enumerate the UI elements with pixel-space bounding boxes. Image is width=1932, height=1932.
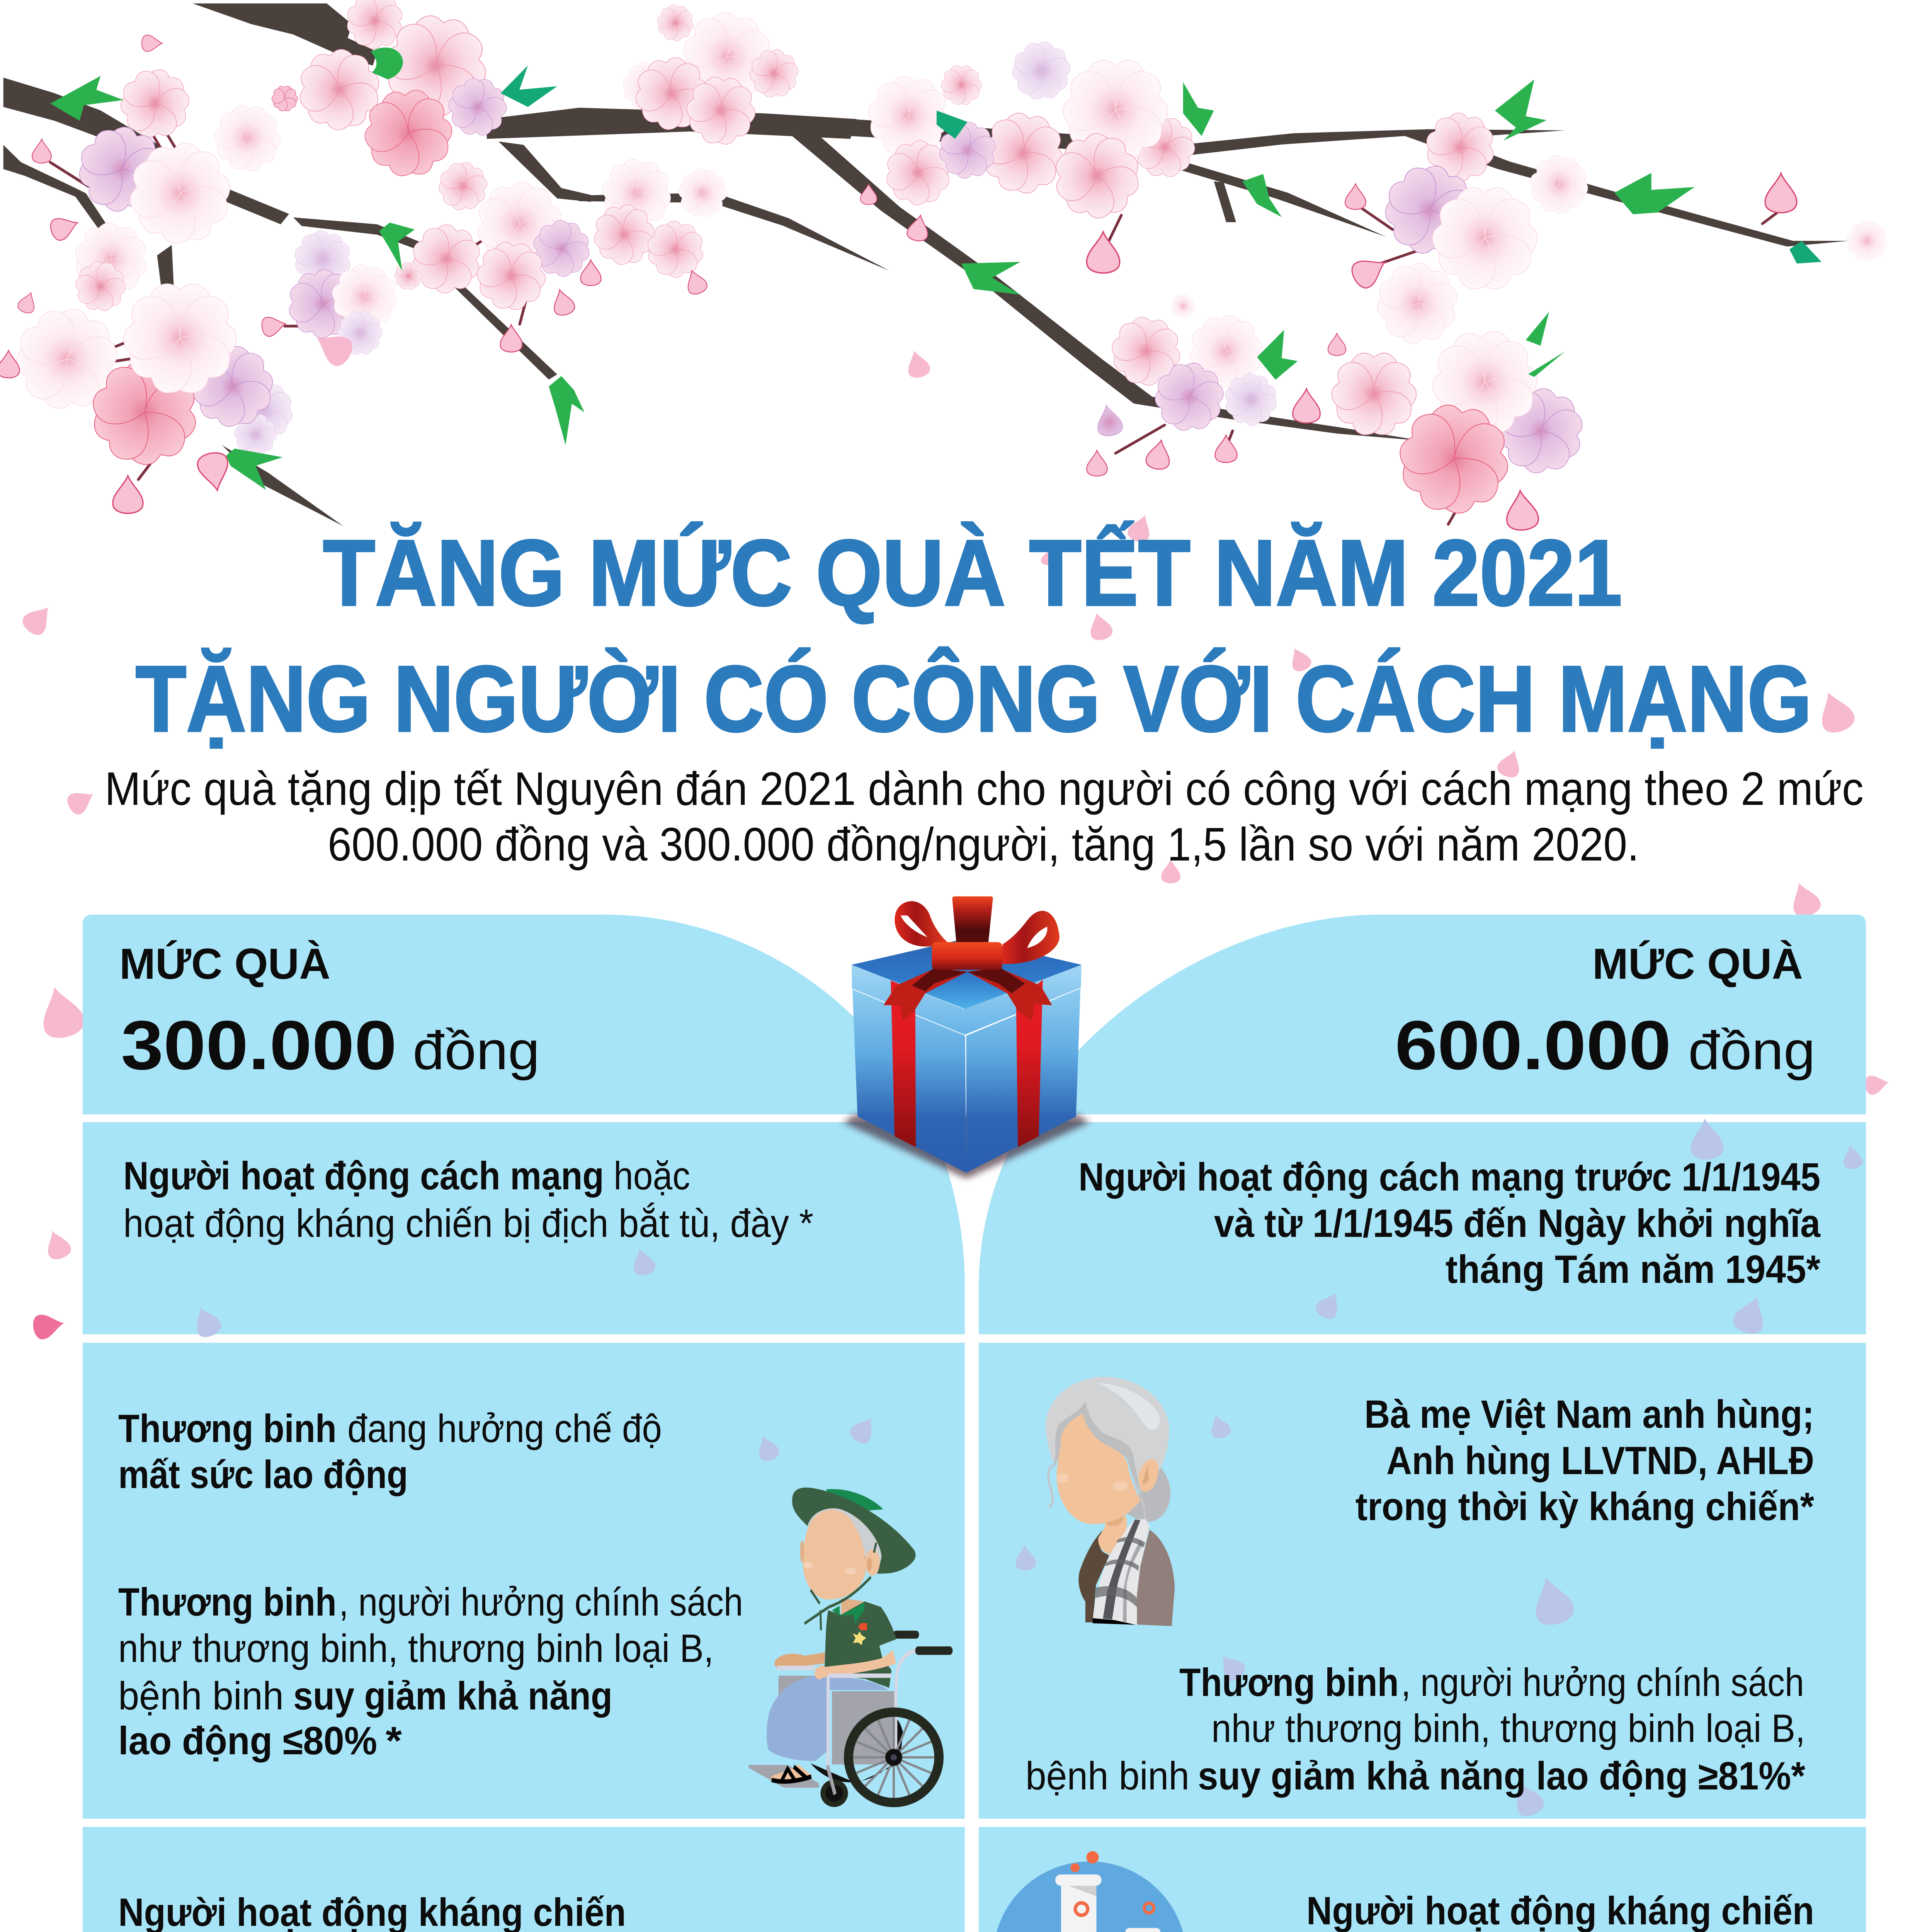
- text: row 2 right: [1078, 1155, 1821, 1291]
- title: [136, 521, 1812, 751]
- left header: 300.000: [121, 1007, 397, 1084]
- bubbles: [1070, 1851, 1099, 1872]
- face: [803, 1510, 866, 1600]
- near arm: [815, 1650, 896, 1679]
- bow loops: [895, 896, 1060, 970]
- hat strap: [804, 1543, 876, 1630]
- cheeks: [1056, 1473, 1128, 1491]
- wheelchair back parts: [779, 1631, 919, 1783]
- text: row 2 left: [123, 1154, 813, 1245]
- text: row 3 right: Anh hùng LLVTND, AHLĐ: [1386, 1439, 1814, 1483]
- stems: [12, 131, 1781, 524]
- far arm: [774, 1652, 825, 1669]
- front caster: [820, 1765, 848, 1807]
- blossoms centre cluster: [627, 2, 1209, 380]
- icon: veteran in wheelchair: [749, 1488, 952, 1807]
- text: row 3 right: Thương binh: [1179, 1660, 1399, 1704]
- neck: [841, 1598, 864, 1616]
- right header: 600.000: [1395, 1007, 1671, 1084]
- panels: light blue rows: [83, 915, 1866, 1932]
- big wheel: [849, 1712, 939, 1803]
- text: row 3 right: suy giảm khả năng lao động ≥81%*: [1198, 1754, 1805, 1798]
- falling petals outside panels: [19, 512, 1891, 1341]
- blossoms right cluster: [1087, 106, 1890, 531]
- hair strands: [1048, 1465, 1145, 1519]
- blossoms left cluster: [0, 0, 738, 514]
- text: row 3 left: Thương binh: [118, 1580, 337, 1624]
- text: row 3 left: mất sức lao động: [118, 1452, 408, 1497]
- text: row 2 right: Người hoạt động cách mạng trước 1/1/1945: [1078, 1155, 1820, 1199]
- icon: chemistry flasks: [993, 1851, 1187, 1932]
- icon: elderly mother: [1046, 1377, 1175, 1626]
- intro text: 600.000 đồng và 300.000 đồng/người, tăng 1,5 lần so với năm 2020.: [328, 818, 1639, 871]
- text: row 3 left: bệnh binh: [118, 1674, 284, 1718]
- text: row 3 right: [1026, 1392, 1814, 1798]
- medal: [852, 1623, 867, 1645]
- hair bun: [1127, 1463, 1170, 1522]
- small flask: [1088, 1903, 1173, 1932]
- text: row 3 left: lao động ≤80%: [118, 1719, 377, 1763]
- text: row 2 right: và từ 1/1/1945 đến Ngày khởi nghĩa: [1214, 1201, 1821, 1245]
- text: row 3 right: như thương binh, thương binh loại B,: [1211, 1706, 1805, 1750]
- text: row 2 left: hoạt động kháng chiến bị địch bắt tù, đày *: [123, 1201, 813, 1245]
- hat brim: [792, 1488, 916, 1574]
- text: row 4 right: Người hoạt động kháng chiến: [1306, 1889, 1814, 1932]
- text: row 3 right: Bà mẹ Việt Nam anh hùng;: [1364, 1392, 1814, 1436]
- front handle: [915, 1646, 952, 1655]
- left header: [119, 940, 540, 1084]
- illustration: cherry blossom branches: [0, 0, 1890, 531]
- gift shadow: [843, 1115, 1089, 1179]
- plaid scarf: [1093, 1519, 1150, 1625]
- left header: đồng: [413, 1020, 540, 1081]
- text: row 3 left: *: [386, 1719, 402, 1763]
- hair: [808, 1509, 882, 1573]
- seat panel: [832, 1691, 895, 1764]
- text: row 2 left: Người hoạt động cách mạng: [123, 1154, 604, 1198]
- right header: [1395, 940, 1815, 1084]
- right header: đồng: [1688, 1020, 1815, 1081]
- footrest: [749, 1765, 819, 1788]
- text: row 2 left: hoặc: [614, 1154, 690, 1198]
- dark shirt: [1078, 1528, 1109, 1622]
- face: [1056, 1413, 1140, 1524]
- round flask: [1020, 1874, 1126, 1932]
- text: row 3 left: như thương binh, thương binh loại B,: [118, 1626, 714, 1670]
- text: row 2 right: tháng Tám năm 1945*: [1446, 1247, 1820, 1291]
- hair: [1046, 1377, 1169, 1480]
- collar: [832, 1602, 865, 1624]
- box faces: [852, 938, 1082, 1173]
- text: row 3 left: suy giảm khả năng: [293, 1674, 612, 1718]
- vertical ribbons: [891, 980, 1043, 1147]
- ribbon tails: [883, 968, 1052, 1021]
- trousers: [767, 1676, 888, 1761]
- panel text: row 1 headers: [119, 940, 1815, 1084]
- intro text: [105, 762, 1864, 871]
- text: row 3 left: đang hưởng chế độ: [347, 1406, 662, 1451]
- leaves: [50, 48, 1821, 490]
- background circle: [993, 1861, 1187, 1932]
- branches: [3, 3, 1849, 526]
- icon: large blue gift box: [843, 896, 1089, 1179]
- frame: [777, 1650, 917, 1765]
- title: TĂNG MỨC QUÀ TẾT NĂM 2021: [323, 521, 1622, 625]
- right header: MỨC QUÀ: [1592, 940, 1803, 988]
- text: row 3 right: trong thời kỳ kháng chiến*: [1355, 1485, 1814, 1529]
- text: row 3 right: bệnh binh: [1026, 1754, 1189, 1798]
- petals over panels: [189, 1117, 1864, 1820]
- text: row 3 left: , người hưởng chính sách: [339, 1580, 743, 1624]
- cardigan: [1136, 1530, 1175, 1626]
- foot and sandal: [771, 1764, 811, 1782]
- text: row 3 left: [118, 1406, 743, 1763]
- text: row 3 right: , người hưởng chính sách: [1401, 1660, 1804, 1704]
- left header: MỨC QUÀ: [119, 940, 330, 988]
- hat crown: [826, 1489, 883, 1513]
- shirt: [824, 1601, 896, 1688]
- neck: [1098, 1515, 1127, 1555]
- text: row 3 left: Thương binh: [118, 1406, 337, 1451]
- ears and cheeks: [800, 1541, 880, 1575]
- ear: [1138, 1459, 1158, 1492]
